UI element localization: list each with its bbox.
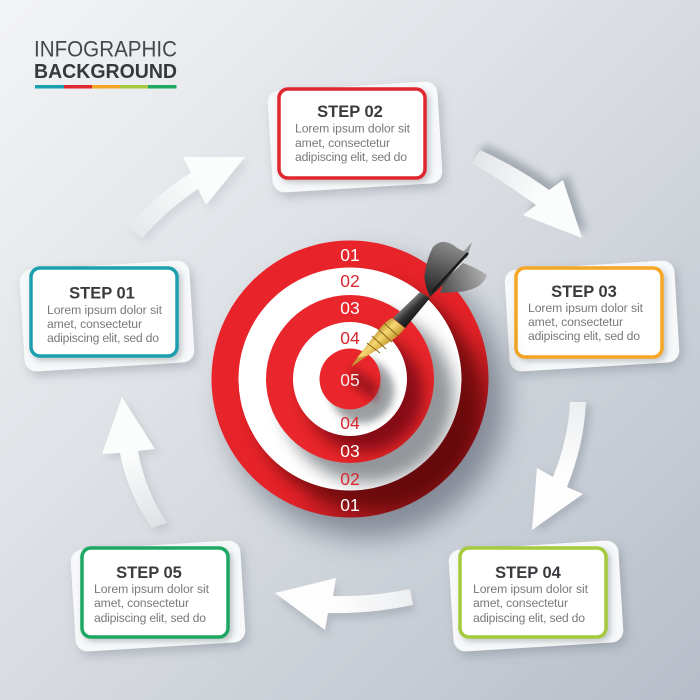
- ring numbers: 04: [340, 328, 360, 348]
- card: step 04: adipiscing elit, sed do: [473, 611, 585, 625]
- card: step 02: adipiscing elit, sed do: [295, 150, 407, 164]
- card: step 03: Lorem ipsum dolor sit: [528, 301, 644, 315]
- card: step 04: amet, consectetur: [473, 596, 568, 610]
- dart shadow on bullseye: [352, 366, 378, 402]
- ring numbers: 05: [340, 370, 360, 390]
- target board: [212, 240, 506, 538]
- card: step 05: [70, 540, 246, 652]
- card: step 04: Lorem ipsum dolor sit: [473, 582, 589, 596]
- ring numbers: 01: [340, 495, 360, 515]
- ring numbers: 03: [340, 298, 360, 318]
- ring numbers: 01: [340, 245, 360, 265]
- arrow: step 03 to step 04: [532, 402, 591, 533]
- card: step 03: adipiscing elit, sed do: [528, 329, 640, 343]
- card: step 01: adipiscing elit, sed do: [47, 331, 159, 345]
- card: step 01: [19, 260, 195, 372]
- title: BACKGROUND: [34, 61, 177, 83]
- arrow: step 05 to step 01: [102, 397, 171, 532]
- card: step 05: amet, consectetur: [94, 596, 189, 610]
- card: step 03: STEP 03: [551, 283, 617, 301]
- ring numbers: 02: [340, 469, 360, 489]
- arrow: step 04 to step 05: [275, 578, 415, 636]
- card: step 02: Lorem ipsum dolor sit: [295, 122, 411, 136]
- ring numbers: [340, 245, 360, 515]
- title: [34, 36, 177, 88]
- ring numbers: 03: [340, 441, 360, 461]
- card: step 04: [448, 540, 624, 652]
- card: step 05: adipiscing elit, sed do: [94, 611, 206, 625]
- card: step 05: Lorem ipsum dolor sit: [94, 582, 210, 596]
- arrow: step 01 to step 02: [128, 157, 249, 243]
- ring numbers: 04: [340, 413, 360, 433]
- ring numbers: 02: [340, 271, 360, 291]
- card: step 05: STEP 05: [116, 564, 182, 582]
- card: step 03: amet, consectetur: [528, 315, 623, 329]
- card: step 01: Lorem ipsum dolor sit: [47, 303, 163, 317]
- card: step 02: amet, consectetur: [295, 136, 390, 150]
- title: INFOGRAPHIC: [34, 36, 177, 62]
- card: step 03: [504, 260, 680, 372]
- card: step 02: [267, 81, 443, 193]
- card: step 01: STEP 01: [69, 284, 135, 302]
- arrow: step 02 to step 03: [472, 144, 587, 238]
- icon: dart: [351, 242, 487, 367]
- card: step 02: STEP 02: [317, 103, 383, 121]
- card: step 04: STEP 04: [495, 564, 562, 582]
- card: step 01: amet, consectetur: [47, 317, 142, 331]
